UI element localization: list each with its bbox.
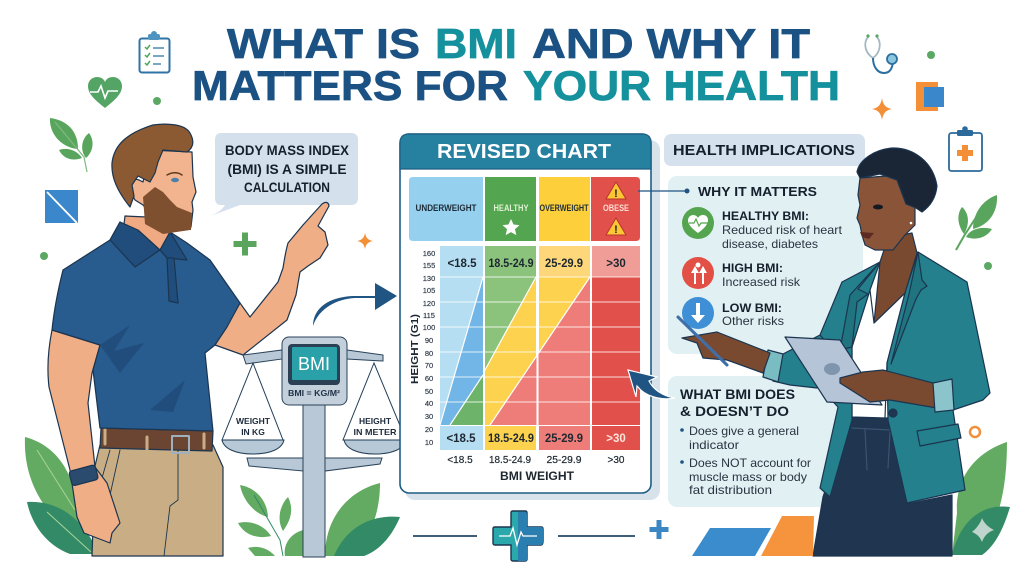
chart panel shadow bbox=[405, 140, 660, 500]
scale: right pan: IN METER bbox=[354, 427, 396, 437]
text: low BMI: LOW BMI: bbox=[722, 303, 782, 315]
speech bubble: (BMI) IS A SIMPLE bbox=[228, 162, 346, 177]
man: placket bbox=[167, 258, 178, 303]
scale: left pan: IN KG bbox=[241, 427, 265, 437]
category: underweight: UNDERWEIGHT bbox=[416, 203, 477, 213]
text: healthy BMI: HEALTHY BMI: bbox=[722, 211, 809, 223]
category: overweight: OVERWEIGHT bbox=[540, 203, 589, 213]
x axis labels bbox=[447, 455, 625, 466]
woman: trousers bbox=[813, 418, 952, 556]
man illustration bbox=[48, 124, 329, 556]
title: AND WHY IT bbox=[532, 20, 810, 67]
connector from obese cell bbox=[638, 188, 690, 194]
panel: why it matters bbox=[638, 176, 863, 354]
y axis labels: 120 bbox=[423, 299, 435, 308]
top row values: <18.5 bbox=[447, 258, 477, 270]
chart header band bbox=[400, 134, 651, 169]
bottom row values: <18.5 bbox=[446, 433, 476, 445]
bullet list: indicator bbox=[689, 438, 739, 452]
speech bubble bbox=[208, 133, 358, 217]
top row values: 25-29.9 bbox=[545, 258, 583, 270]
y axis labels: 105 bbox=[423, 286, 435, 295]
man: raised arm and hand bbox=[215, 202, 329, 355]
scale: pole bbox=[303, 405, 325, 557]
scale: left pan bbox=[222, 363, 284, 454]
y axis labels: 115 bbox=[423, 311, 435, 320]
woman: lapel right bbox=[891, 252, 927, 364]
leaves bottom of scale bbox=[238, 483, 400, 556]
panel: revised chart bbox=[400, 134, 660, 500]
category: obese bbox=[591, 177, 640, 241]
icon: high BMI bbox=[682, 257, 714, 289]
category: healthy bbox=[485, 177, 536, 241]
arrow: curved to chart bbox=[313, 283, 397, 326]
woman: cuff bbox=[763, 350, 783, 382]
scale: left pan: WEIGHT bbox=[236, 416, 271, 426]
icon: low BMI bbox=[682, 297, 714, 329]
man: shirt shading bbox=[100, 325, 185, 412]
arrow: from panel to chart bbox=[628, 370, 675, 399]
panel: health implications heading: HEALTH IMPLICATIONS bbox=[673, 143, 855, 159]
panel: health implications heading bbox=[664, 134, 865, 166]
category: obese: OBESE bbox=[603, 203, 629, 213]
title bbox=[192, 20, 840, 109]
title: BMI bbox=[435, 20, 517, 67]
woman: pocket bbox=[917, 424, 961, 446]
chart panel frame bbox=[400, 134, 651, 493]
man: pants seams bbox=[102, 450, 178, 556]
woman: jacket right bbox=[887, 252, 990, 503]
title: MATTERS FOR bbox=[192, 62, 508, 109]
scale: lower bars bbox=[247, 458, 382, 471]
bullet list: fat distribution bbox=[689, 483, 772, 497]
man: hair bbox=[112, 124, 193, 207]
icon: leaf sprig right bbox=[956, 195, 997, 437]
top row values: 18.5-24.9 bbox=[488, 258, 534, 270]
heading: WHAT BMI DOES bbox=[680, 386, 795, 402]
man: belt bbox=[100, 428, 213, 453]
scale: beam bbox=[243, 350, 383, 364]
woman: hand and forearm bbox=[840, 370, 937, 408]
woman: pointing sleeve bbox=[773, 335, 838, 388]
decorative shapes left bbox=[40, 97, 373, 260]
text: healthy BMI bbox=[722, 211, 843, 251]
x axis labels: <18.5 bbox=[447, 455, 473, 466]
woman: pen bbox=[678, 317, 727, 365]
scale: BMI display: BMI = KG/M² bbox=[288, 389, 340, 398]
y axis labels: 100 bbox=[423, 323, 435, 332]
speech bubble: CALCULATION bbox=[244, 180, 330, 195]
woman: jacket left bbox=[820, 262, 880, 497]
text: high BMI bbox=[722, 263, 801, 289]
category: obese: ! bbox=[614, 224, 618, 236]
bottom row values: 18.5-24.9 bbox=[488, 433, 534, 445]
man: watch bbox=[69, 465, 99, 486]
woman illustration bbox=[678, 148, 990, 556]
text: low BMI: Other risks bbox=[722, 314, 784, 328]
text: healthy BMI: Reduced risk of heart bbox=[722, 223, 843, 237]
y axis labels: 160 bbox=[423, 249, 435, 258]
woman: neck and chest bbox=[874, 233, 917, 323]
category: overweight bbox=[539, 177, 590, 241]
man: collar right bbox=[160, 232, 187, 260]
y axis labels: 130 bbox=[423, 274, 435, 283]
scale with BMI display bbox=[222, 337, 406, 557]
top row values bbox=[447, 258, 626, 270]
heading: WHY IT MATTERS bbox=[698, 184, 817, 199]
scale: BMI display bbox=[282, 337, 347, 405]
chart header band: REVISED CHART bbox=[437, 141, 611, 163]
y axis labels: 50 bbox=[425, 387, 433, 396]
y axis labels: 30 bbox=[425, 412, 433, 421]
category: obese: ! bbox=[614, 188, 618, 200]
woman: face bbox=[857, 175, 915, 250]
icon: leaf sprig top left bbox=[50, 118, 93, 172]
top row values: >30 bbox=[606, 258, 626, 270]
woman: jacket button bbox=[889, 409, 897, 417]
y axis labels: 80 bbox=[425, 349, 433, 358]
text: high BMI: Increased risk bbox=[722, 275, 801, 289]
decorative parallelograms bbox=[692, 516, 814, 556]
y axis labels: 90 bbox=[425, 336, 433, 345]
speech bubble: BODY MASS INDEX bbox=[225, 143, 349, 158]
icon: medical clipboard bbox=[949, 126, 982, 171]
x axis labels: 25-29.9 bbox=[546, 455, 582, 466]
man: ear and face bbox=[129, 150, 196, 227]
woman: lapel left bbox=[840, 262, 880, 350]
scale: right pan: HEIGHT bbox=[359, 416, 392, 426]
bullet list: muscle mass or body bbox=[689, 470, 807, 484]
y axis labels: 20 bbox=[425, 425, 433, 434]
y axis labels: 155 bbox=[423, 261, 435, 270]
man: collar bbox=[110, 222, 160, 267]
icon: stethoscope bbox=[865, 34, 897, 73]
icon: cross with pulse bbox=[493, 511, 543, 561]
y axis labels bbox=[423, 249, 435, 447]
man: beard bbox=[143, 187, 192, 234]
bullet list bbox=[680, 424, 811, 497]
x axis title: BMI WEIGHT bbox=[500, 469, 575, 483]
BMI grid bbox=[440, 246, 640, 450]
panel: what BMI does and doesn't do bbox=[668, 376, 843, 507]
title: YOUR HEALTH bbox=[523, 62, 840, 109]
icon: small blue plus bbox=[650, 520, 668, 539]
x axis labels: 18.5-24.9 bbox=[489, 455, 531, 466]
text: low BMI bbox=[722, 303, 784, 328]
x axis labels: >30 bbox=[608, 455, 625, 466]
category: underweight bbox=[409, 177, 483, 241]
y axis title: HEIGHT (G1) bbox=[410, 314, 421, 384]
bottom row values bbox=[446, 433, 626, 445]
bottom medical cross divider bbox=[413, 511, 668, 561]
decorative shapes top right bbox=[872, 51, 944, 120]
y axis labels: 60 bbox=[425, 374, 433, 383]
title: WHAT IS bbox=[227, 20, 420, 67]
leaves bottom right bbox=[952, 442, 1010, 555]
woman: trouser waistband bbox=[852, 428, 890, 470]
icon: heart with pulse bbox=[88, 77, 122, 108]
y axis labels: 40 bbox=[425, 399, 433, 408]
leaves bottom left bbox=[25, 437, 99, 554]
icon: checklist clipboard bbox=[140, 31, 170, 72]
woman: lips and eye bbox=[860, 204, 912, 239]
woman: blouse bbox=[852, 290, 905, 418]
woman: pointing hand bbox=[682, 332, 770, 373]
text: high BMI: HIGH BMI: bbox=[722, 263, 783, 275]
scale: right pan bbox=[343, 363, 406, 454]
man: neck bbox=[124, 216, 170, 250]
man: eye bbox=[167, 173, 182, 182]
bullet list: Does NOT account for bbox=[689, 456, 811, 470]
bottom row values: >30 bbox=[606, 433, 626, 445]
y axis labels: 10 bbox=[425, 438, 433, 447]
woman: hair bbox=[857, 148, 937, 212]
woman: tablet bbox=[785, 337, 882, 405]
scale: BMI display: BMI bbox=[298, 354, 330, 374]
text: healthy BMI: disease, diabetes bbox=[722, 237, 818, 251]
man: pants bbox=[92, 445, 223, 556]
man: hanging arm and hand bbox=[48, 330, 120, 543]
icon: healthy heart bbox=[682, 207, 714, 239]
man: shirt bbox=[52, 222, 240, 431]
heading: & DOESN’T DO bbox=[680, 403, 789, 419]
woman: second cuff bbox=[933, 379, 954, 412]
category: healthy: HEALTHY bbox=[494, 203, 528, 213]
heading bbox=[680, 386, 795, 419]
bottom row values: 25-29.9 bbox=[545, 433, 583, 445]
y axis labels: 70 bbox=[425, 361, 433, 370]
bullet list: Does give a general bbox=[689, 424, 799, 438]
